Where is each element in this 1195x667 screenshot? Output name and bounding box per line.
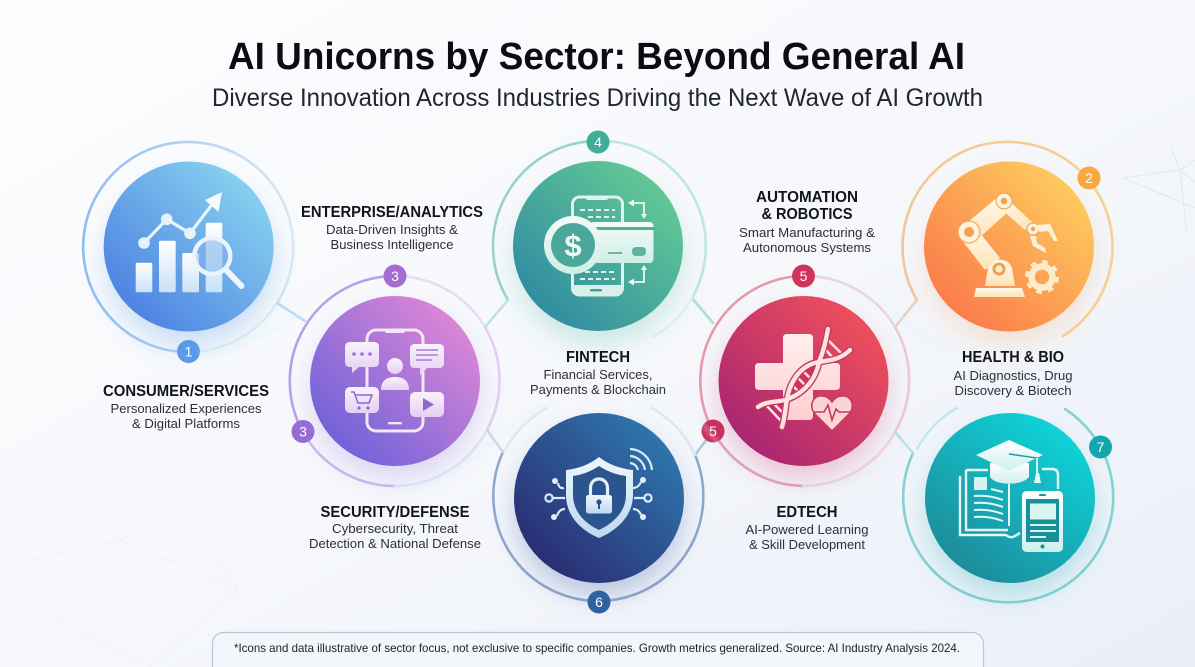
disc glow 5 bbox=[719, 310, 887, 478]
panel: automation & robotics bbox=[700, 189, 909, 486]
badge 6: 6 bbox=[595, 594, 603, 610]
badge 3 top bbox=[384, 264, 406, 288]
label: security/defense: Cybersecurity, Threat bbox=[332, 522, 459, 536]
label: enterprise/analytics: Business Intelligence bbox=[330, 238, 454, 252]
disc 2 bbox=[924, 162, 1094, 332]
footnote box bbox=[212, 632, 984, 667]
badge 2 bbox=[1078, 166, 1100, 190]
background network lines bbox=[0, 145, 1195, 667]
label: fintech: FINTECH bbox=[566, 349, 630, 366]
disc glow 1 bbox=[106, 178, 274, 346]
badge 7: 7 bbox=[1097, 439, 1105, 455]
disc glow 4 bbox=[514, 176, 682, 344]
label: automation & robotics: & ROBOTICS bbox=[762, 206, 853, 223]
label: security/defense: Detection & National Defense bbox=[309, 537, 481, 551]
icon: phone with apps bbox=[345, 329, 444, 431]
disc 6 bbox=[514, 413, 684, 583]
icon: medical cross, DNA and heart bbox=[755, 329, 852, 431]
label: security/defense bbox=[309, 504, 481, 551]
label: edtech bbox=[746, 504, 869, 552]
icon: phone, card and coin bbox=[544, 196, 654, 296]
badge 1 bbox=[177, 340, 200, 363]
label: enterprise/analytics: Data-Driven Insights & bbox=[326, 223, 459, 237]
badge 5 top bbox=[792, 264, 815, 288]
label: automation & robotics: Autonomous Systems bbox=[743, 241, 871, 255]
glow streaks bbox=[200, 300, 950, 488]
panel: enterprise/analytics bbox=[290, 204, 500, 486]
label: health & bio bbox=[954, 349, 1073, 398]
ring 7 bbox=[895, 408, 1113, 602]
badge 4 bbox=[586, 130, 610, 154]
badge 6 bbox=[588, 590, 610, 614]
label: automation & robotics bbox=[739, 189, 876, 255]
icon: chart with magnifier bbox=[136, 192, 242, 292]
disc 7 bbox=[925, 413, 1095, 583]
label: fintech bbox=[530, 349, 666, 397]
badge 3 top: 3 bbox=[391, 268, 399, 284]
icon: robot arm and gear bbox=[958, 193, 1058, 297]
icon: phone, card and coin: $ bbox=[564, 228, 582, 263]
panel: fintech bbox=[485, 130, 713, 397]
icon: graduation cap, book and tablet bbox=[960, 440, 1063, 552]
label: fintech: Payments & Blockchain bbox=[530, 383, 666, 397]
label: edtech: AI-Powered Learning bbox=[746, 523, 869, 537]
badge 7 bbox=[1089, 436, 1112, 458]
label: enterprise/analytics: ENTERPRISE/ANALYTICS bbox=[301, 204, 483, 221]
disc 5 bbox=[718, 296, 888, 466]
label: automation & robotics: Smart Manufacturing & bbox=[739, 226, 876, 240]
badge 5 left bbox=[702, 420, 724, 442]
icon: shield with lock bbox=[545, 449, 652, 538]
subtitle: Diverse Innovation Across Industries Driving the Next Wave of AI Growth bbox=[212, 84, 983, 112]
ring 1 bbox=[83, 142, 305, 352]
label: consumer/services: CONSUMER/SERVICES bbox=[103, 383, 269, 400]
label: automation & robotics: AUTOMATION bbox=[756, 189, 858, 206]
ring 5 bbox=[700, 276, 909, 486]
badge 3 left: 3 bbox=[299, 424, 307, 440]
disc glow 6 bbox=[515, 428, 683, 596]
badge 4: 4 bbox=[594, 134, 602, 150]
disc 1 bbox=[104, 162, 274, 332]
label: health & bio: AI Diagnostics, Drug bbox=[954, 369, 1073, 383]
disc glow 3 bbox=[311, 310, 479, 478]
ring 2 bbox=[895, 142, 1113, 336]
label: fintech: Financial Services, bbox=[544, 368, 652, 382]
badge 3 left bbox=[292, 420, 314, 443]
ring 4 bbox=[485, 141, 713, 337]
label: consumer/services bbox=[103, 383, 269, 431]
badge 5 left: 5 bbox=[709, 423, 717, 439]
panel: security/defense bbox=[309, 408, 713, 614]
badge 5 top: 5 bbox=[800, 268, 808, 284]
disc 3 bbox=[310, 296, 480, 466]
label: enterprise/analytics bbox=[301, 204, 483, 252]
label: consumer/services: & Digital Platforms bbox=[132, 417, 240, 431]
panel: edtech bbox=[702, 408, 1113, 602]
label: health & bio: HEALTH & BIO bbox=[962, 349, 1064, 366]
disc glow 7 bbox=[926, 428, 1094, 596]
label: edtech: EDTECH bbox=[776, 504, 838, 521]
footnote text: *Icons and data illustrative of sector focus, not exclusive to specific companies. Growth metrics generalized. Source: AI Industry Analysis 2024. bbox=[234, 641, 960, 655]
panel: health & bio bbox=[895, 142, 1113, 398]
label: health & bio: Discovery & Biotech bbox=[954, 384, 1072, 398]
title: AI Unicorns by Sector: Beyond General AI bbox=[228, 36, 965, 78]
panel: consumer/services bbox=[83, 142, 305, 431]
disc 4 bbox=[513, 161, 683, 331]
disc glow 2 bbox=[925, 176, 1093, 344]
ring 3 bbox=[290, 276, 500, 486]
ring 6 bbox=[487, 408, 713, 601]
label: security/defense: SECURITY/DEFENSE bbox=[320, 504, 470, 521]
label: edtech: & Skill Development bbox=[749, 538, 866, 552]
badge 2: 2 bbox=[1085, 170, 1093, 186]
badge 1: 1 bbox=[185, 344, 193, 360]
label: consumer/services: Personalized Experiences bbox=[110, 402, 262, 416]
